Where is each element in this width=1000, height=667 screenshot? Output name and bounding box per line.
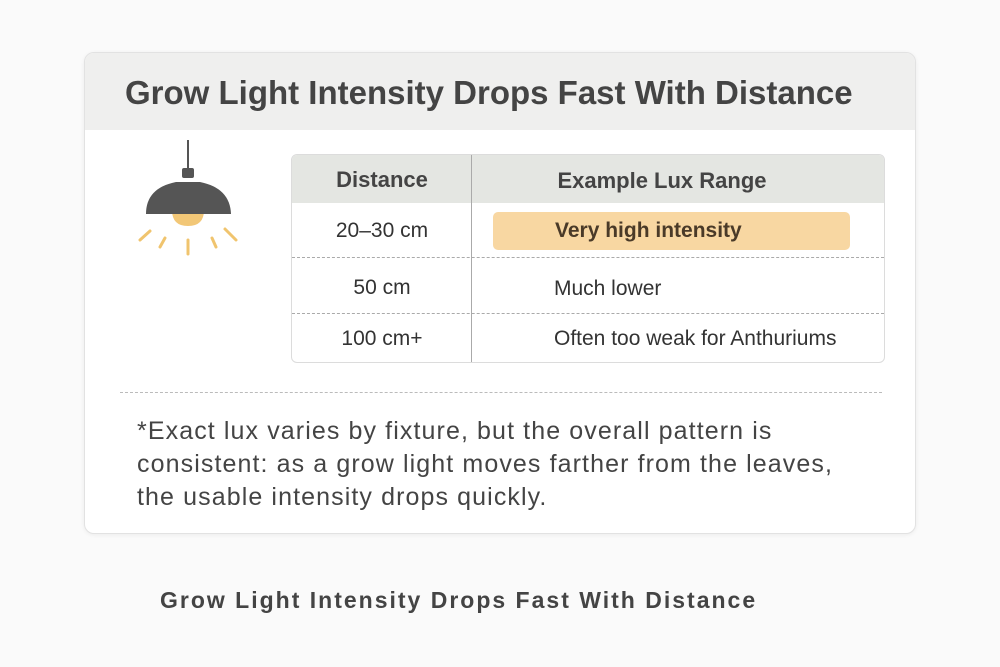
footnote [137, 417, 833, 511]
footnote: the usable intensity drops quickly. [137, 483, 547, 511]
caption: Grow Light Intensity Drops Fast With Distance [160, 587, 757, 613]
footnote: consistent: as a grow light moves farther from the leaves, [137, 450, 833, 478]
table: Distance [336, 167, 428, 192]
header band [85, 53, 915, 130]
table: Often too weak for Anthuriums [554, 327, 836, 350]
table: Much lower [554, 277, 661, 300]
panel: main card [84, 52, 916, 534]
icon: hanging lamp [138, 140, 238, 256]
table [291, 154, 885, 363]
highlight: very high intensity: Very high intensity [555, 219, 742, 242]
row 1: 20–30 cm [336, 219, 428, 242]
row 2: 50 cm [353, 276, 411, 299]
table: Example Lux Range [557, 168, 767, 193]
footnote: *Exact lux varies by fixture, but the overall pattern is [137, 417, 772, 445]
table header [292, 155, 884, 203]
title: Grow Light Intensity Drops Fast With Distance [125, 74, 853, 111]
highlight: very high intensity [493, 212, 850, 250]
row 3: 100 cm+ [341, 327, 423, 350]
